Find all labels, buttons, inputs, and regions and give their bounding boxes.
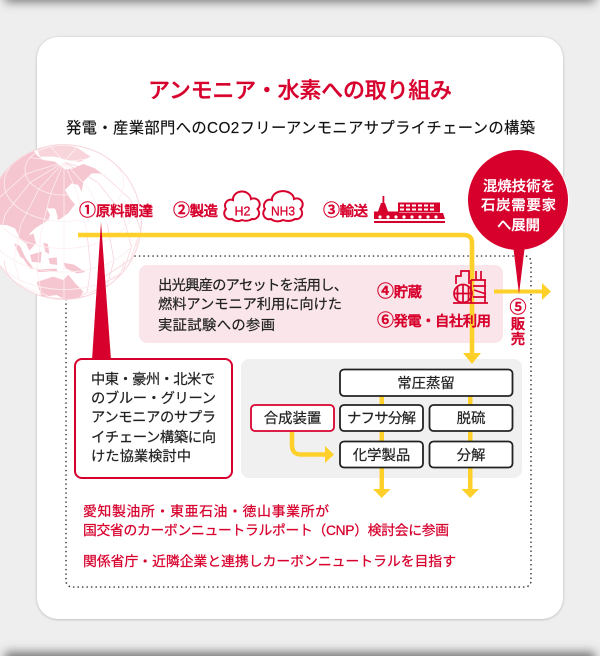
panel: main white card [37, 37, 563, 620]
arrow: yellow sales arrow [494, 283, 551, 300]
subtitle: 発電・産業部門へのCO2フリーアンモニアサプライチェーンの構築 [66, 119, 535, 137]
process box: desulfurization [430, 405, 512, 431]
callout: cooperation text box: のブルー・グリーン [91, 389, 216, 407]
dotted boundary [66, 256, 531, 587]
arrow: synthesis unit to chemical products [292, 432, 334, 463]
callout: cooperation text box: アンモニアのサプラ [91, 409, 216, 426]
process box: atmospheric distillation [340, 370, 512, 396]
title: アンモニア・水素への取り組み [148, 78, 452, 103]
label: transport: ③輸送 [323, 201, 368, 220]
icon: H2 cloud [224, 191, 260, 221]
process box: naphtha cracking: ナフサ分解 [347, 410, 416, 427]
callout: co-firing bubble [468, 150, 568, 294]
arrow: yellow flow right column [462, 396, 479, 498]
process box: cracking: 分解 [457, 447, 485, 464]
arrow: yellow line arrowhead into process box [463, 353, 481, 364]
label: sales vertical: ⑤ [510, 298, 526, 317]
label: sales vertical: 販 [511, 316, 525, 333]
arrow: red pointer to callout [92, 222, 111, 360]
label: storage: ④貯蔵 [377, 282, 422, 301]
callout: co-firing bubble: 混焼技術を [483, 178, 555, 195]
label: sales vertical: 売 [511, 331, 525, 348]
panel: pink demonstration box [139, 265, 503, 343]
label: power and own use: ⑥発電・自社利用 [377, 311, 491, 330]
arrow: main yellow flow line top [78, 235, 472, 265]
process box: cracking [430, 442, 512, 468]
text block: demonstration description: 燃料アンモニア利用に向けた [158, 295, 342, 313]
callout: cooperation text box: イチェーン構築に向 [91, 429, 216, 446]
text block: red notes: 国交省のカーボンニュートラルポート（CNP）検討会に参画 [83, 523, 449, 538]
text block: red notes: 関係省庁・近隣企業と連携しカーボンニュートラルを目指す [83, 554, 456, 569]
icon: NH3 cloud: NH3 [271, 204, 295, 218]
process box: atmospheric distillation: 常圧蒸留 [397, 375, 455, 392]
bottom shadow band [5, 652, 595, 656]
callout: cooperation text box: 中東・豪州・北米で [91, 371, 215, 388]
label: sales vertical [510, 298, 526, 348]
arrow: yellow flow left column [373, 396, 390, 498]
icon: NH3 cloud [263, 191, 303, 221]
callout: cooperation text box: けた協業検討中 [91, 448, 191, 465]
top shadow band [5, 0, 595, 2]
process box: synthesis unit [251, 405, 334, 431]
process box: chemical products [340, 442, 423, 468]
label: raw material procurement: ①原料調達 [79, 201, 153, 220]
text block: demonstration description [158, 277, 348, 334]
icon: globe [0, 143, 142, 300]
icon: ship [374, 196, 445, 223]
icon: H2 cloud: H2 [235, 204, 251, 218]
process box: synthesis unit: 合成装置 [264, 410, 321, 427]
text block: red notes: 愛知製油所・東亜石油・徳山事業所が [83, 503, 329, 519]
process box: desulfurization: 脱硫 [457, 410, 485, 427]
process box: chemical products: 化学製品 [353, 447, 410, 464]
callout: co-firing bubble: 石炭需要家 [481, 197, 556, 214]
callout: cooperation text box [75, 359, 232, 478]
arrow: yellow line through pink box [470, 263, 474, 354]
callout: co-firing bubble: へ展開 [497, 217, 540, 234]
icon: refinery plant [453, 271, 488, 303]
text block: red notes [83, 503, 456, 569]
process box: naphtha cracking [340, 405, 423, 431]
text block: demonstration description: 出光興産のアセットを活用し、 [158, 277, 348, 294]
panel: gray refinery process box [241, 359, 522, 478]
label: manufacturing: ②製造 [173, 201, 218, 220]
text block: demonstration description: 実証試験への参画 [158, 317, 275, 334]
